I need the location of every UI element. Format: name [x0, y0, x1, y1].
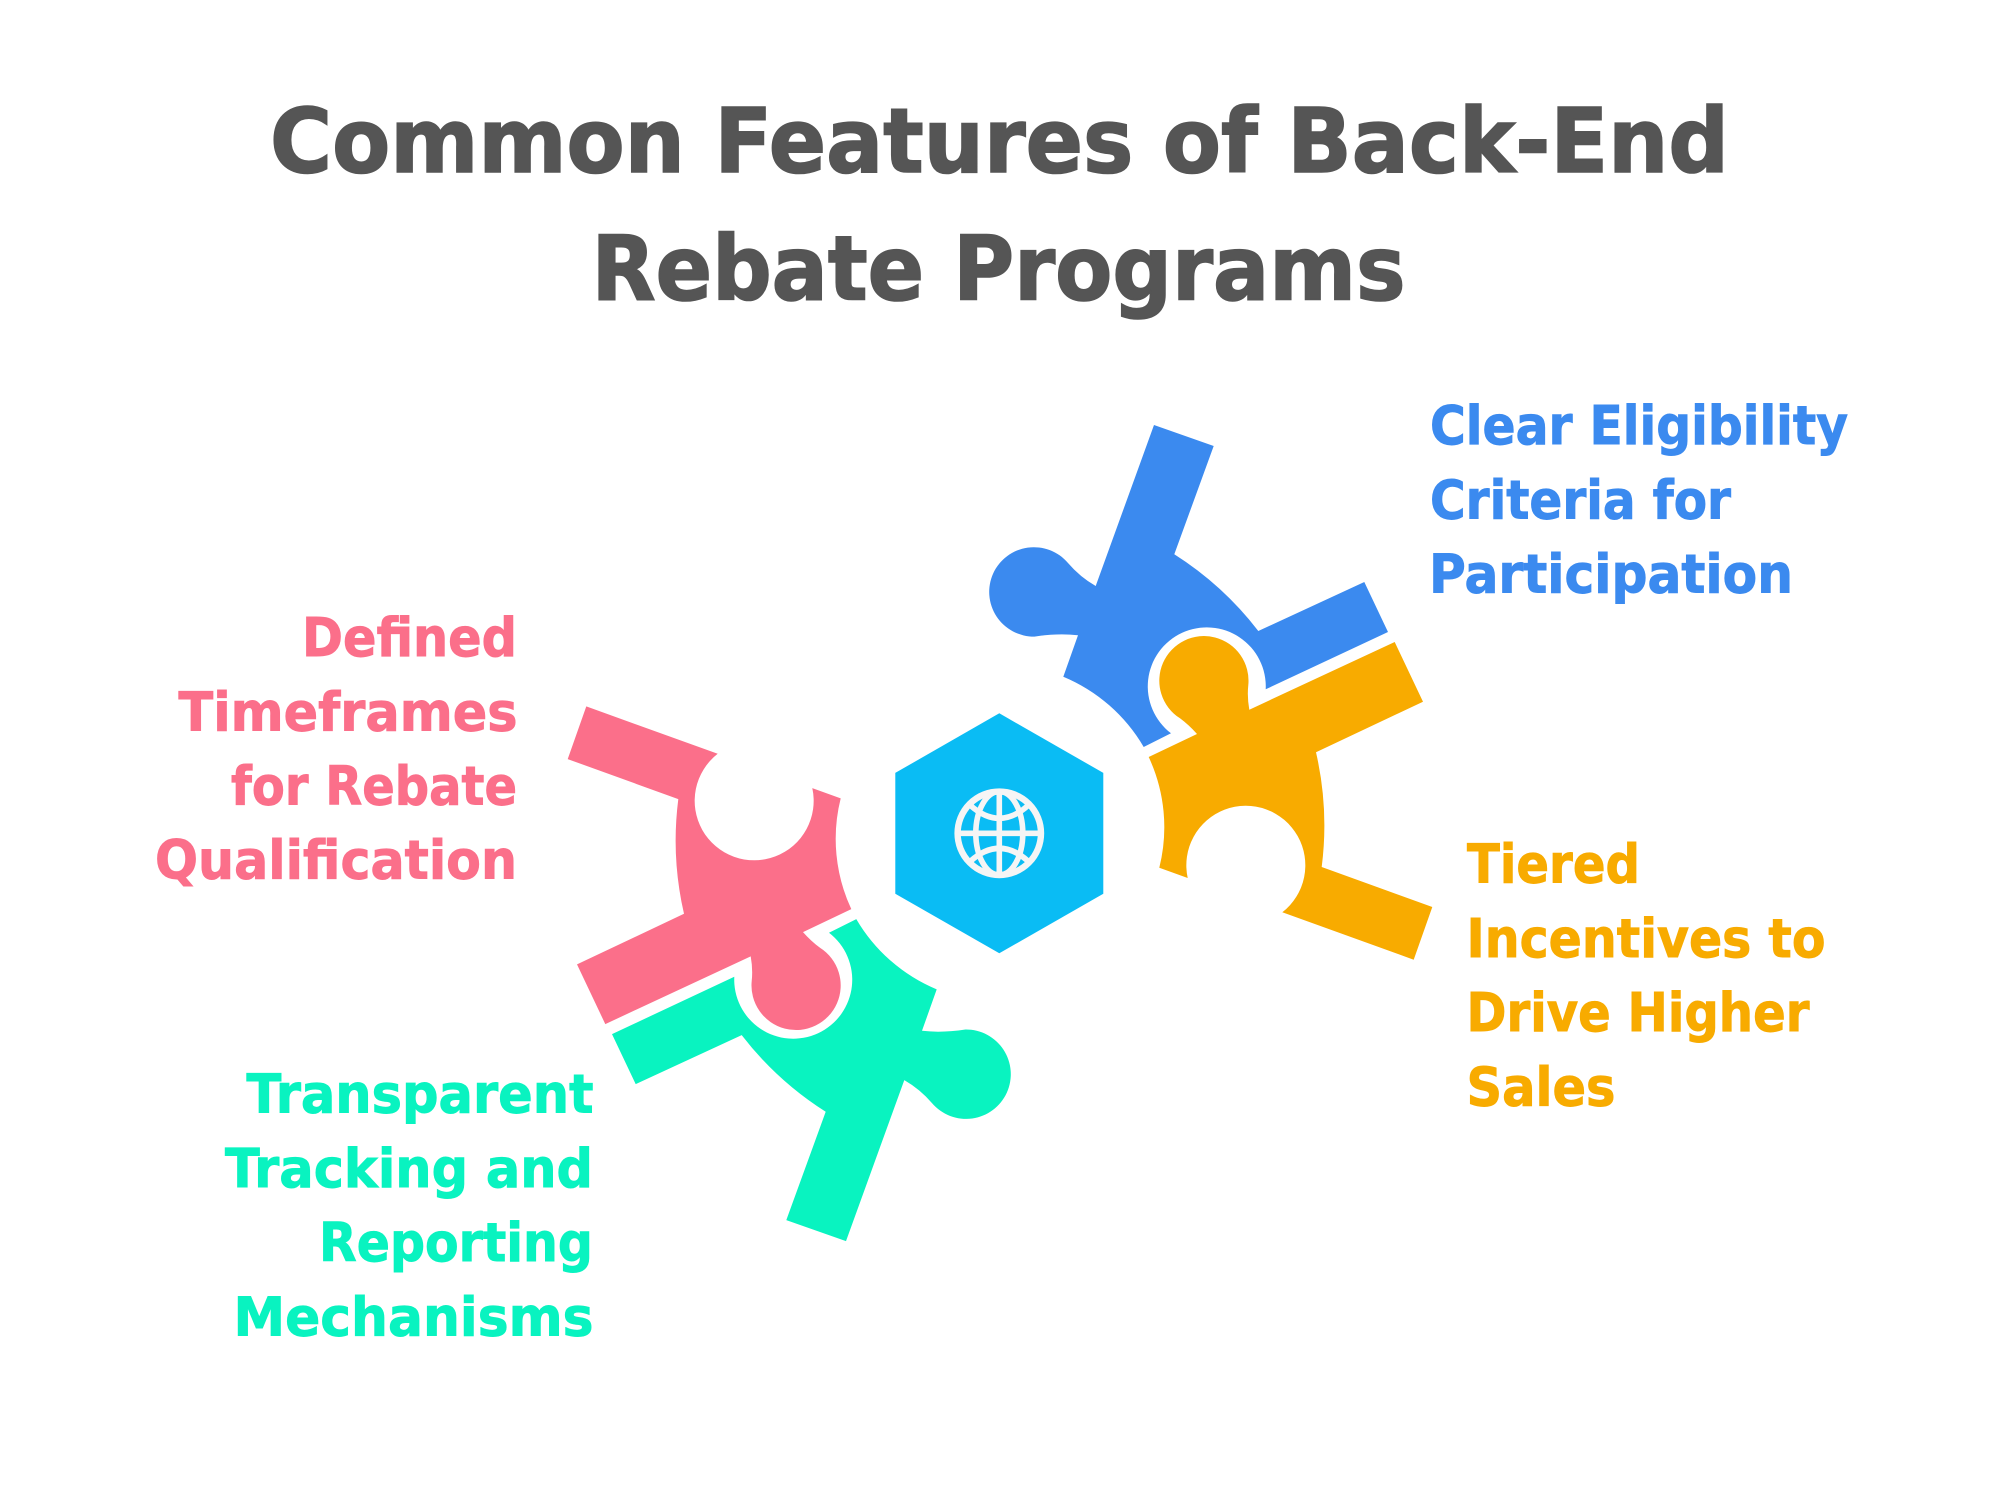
label: defined timeframes: Timeframes	[178, 680, 518, 743]
title: Rebate Programs	[592, 216, 1406, 320]
label: clear eligibility	[1429, 394, 1848, 606]
label: clear eligibility: Clear Eligibility	[1430, 394, 1848, 457]
icon: globe	[958, 792, 1041, 875]
label: defined timeframes	[155, 606, 518, 891]
label: transparent tracking: Transparent	[246, 1063, 594, 1126]
label: defined timeframes: for Rebate	[231, 755, 517, 818]
puzzle piece: pink	[568, 706, 851, 1030]
label: transparent tracking: Mechanisms	[234, 1285, 594, 1348]
label: tiered incentives: Drive Higher	[1466, 981, 1810, 1044]
label: tiered incentives: Tiered	[1467, 833, 1640, 896]
label: defined timeframes: Qualification	[155, 828, 517, 891]
label: tiered incentives	[1466, 833, 1826, 1118]
label: tiered incentives: Sales	[1466, 1055, 1616, 1118]
label: clear eligibility: Participation	[1429, 543, 1793, 606]
label: transparent tracking	[225, 1063, 594, 1348]
label: transparent tracking: Tracking and	[225, 1137, 593, 1200]
label: defined timeframes: Defined	[302, 606, 517, 669]
center hexagon	[895, 713, 1103, 953]
puzzle piece: green	[612, 919, 1011, 1241]
title	[270, 89, 1729, 320]
label: transparent tracking: Reporting	[319, 1211, 593, 1274]
puzzle piece: blue	[989, 425, 1388, 747]
puzzle piece: orange	[1149, 636, 1432, 960]
label: clear eligibility: Criteria for	[1430, 468, 1732, 531]
label: tiered incentives: Incentives to	[1466, 907, 1826, 970]
title: Common Features of Back-End	[270, 89, 1729, 193]
